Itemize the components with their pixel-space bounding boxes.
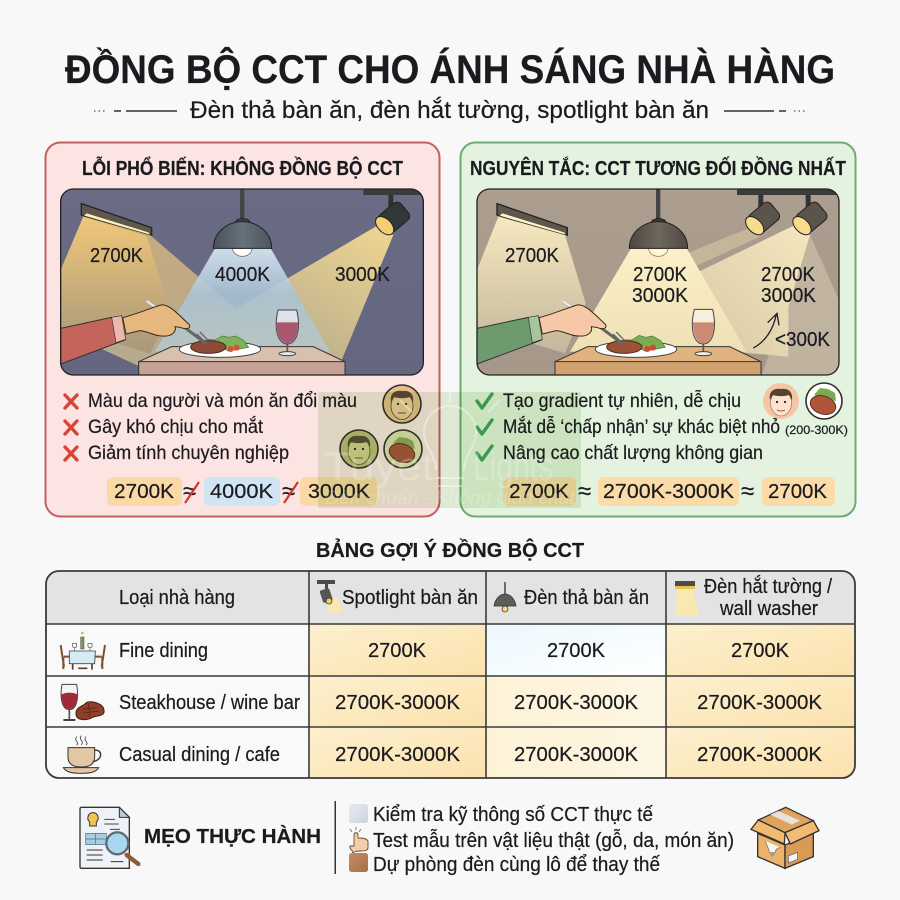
icon: tip inspect [349,804,368,823]
sleeve and hand [477,317,542,364]
subtitle: Đèn thả bàn ăn, đèn hắt tường, spotlight bàn ăn [190,97,709,124]
scene: mismatched lights: 4000K [215,264,271,286]
bullet list: problems: Gây khó chịu cho mắt [88,415,264,438]
wine glass [286,344,288,352]
panel: common mistake [46,142,440,516]
divider [334,801,336,874]
tip 3: Dự phòng đèn cùng lô để thay thế [373,854,660,876]
wall washer [497,204,567,235]
plate and food [179,341,261,357]
table header labels: wall washer [719,598,818,620]
table: CCT recommendations [46,571,855,779]
watermark: Đèn chuẩn - Không gian chất [325,488,576,509]
scene: consistent lights: 2700K [505,245,560,267]
table header labels: Loại nhà hàng [119,587,235,609]
arrow [753,313,779,348]
row: casual dining: 2700K-3000K [514,744,639,766]
table [554,346,762,362]
bullet list: problems [65,390,357,464]
CCT comparison: matched: 2700K [768,481,828,503]
icon: coffee cup [63,736,101,773]
scene: consistent lights [477,189,840,375]
icon: face with green cast [340,430,378,468]
table heading: BẢNG GỢI Ý ĐỒNG BỘ CCT [316,538,584,562]
CCT comparison: mismatched: 3000K [308,481,371,503]
table header labels [119,575,832,620]
icon: natural steak [806,383,842,419]
scene: consistent lights: <300K [775,329,831,351]
CCT comparison: matched [503,477,835,506]
CCT comparison: mismatched: ≈ [183,478,196,505]
CCT comparison: mismatched [107,477,377,506]
row: casual dining: 2700K-3000K [697,744,823,766]
row: fine dining: 2700K [547,640,606,662]
scene: consistent lights: 3000K [632,285,689,307]
table header labels: Đèn hắt tường / [704,575,832,598]
icon: wine and steak [61,684,104,720]
track spotlights [737,190,836,195]
scene: consistent lights: 2700K [633,264,688,286]
scene: mismatched lights: 3000K [335,264,391,286]
bullet list: problems: Giảm tính chuyên nghiệp [88,442,289,464]
icon: tip spare stock [349,853,368,872]
bullet list: problems: Màu da người và món ăn đổi màu [88,390,357,412]
tip 2: Test mẫu trên vật liệu thật (gỗ, da, món ăn) [373,829,734,852]
icon: header pendant [494,582,516,612]
tips list [349,804,734,876]
scene: mismatched lights: 2700K [90,245,144,267]
sleeve and hand [61,317,125,364]
bullet list: benefits: Nâng cao chất lượng không gian [503,442,763,464]
CCT comparison: matched: 2700K [509,481,570,503]
CCT comparison: matched: ≈ [741,478,754,505]
icon: cardboard box [751,807,819,868]
row: steakhouse [61,684,823,720]
row: fine dining [61,632,790,670]
row: fine dining: Fine dining [119,640,208,662]
table header labels: Spotlight bàn ăn [342,587,478,609]
icon: dining table [61,632,105,670]
icon: discoloured steak [384,430,422,468]
watermark: Tuyet [324,445,434,489]
icon: tip pointing hand [350,827,368,854]
tip 1: Kiểm tra kỹ thông số CCT thực tế [373,804,653,826]
table [139,347,345,375]
icon: document with magnifier [80,807,138,868]
icon: natural face [763,383,799,419]
wall washer [81,204,152,235]
row: casual dining [63,736,823,773]
watermark: Lights [473,445,553,489]
icon: header wall washer [675,581,699,615]
row: casual dining: 2700K-3000K [335,744,461,766]
CCT comparison: matched: ≈ [578,478,591,505]
CCT comparison: mismatched: 2700K [114,481,175,503]
CCT comparison: mismatched: ≈ [282,478,295,505]
bullet list: benefits: Mắt dễ ‘chấp nhận’ sự khác biệt nhỏ [503,415,780,438]
panel heading: principle: NGUYÊN TẮC: CCT TƯƠNG ĐỐI ĐỒNG NHẤT [470,156,846,180]
bullet list: benefits [477,389,848,464]
scene: consistent lights: 3000K [761,285,817,307]
tips heading: MẸO THỰC HÀNH [144,825,321,848]
watermark [318,392,581,509]
CCT comparison: matched: 2700K-3000K [603,481,735,503]
CCT comparison: mismatched: 4000K [210,481,274,503]
row: steakhouse: 2700K-3000K [697,692,823,714]
icon: face with orange cast [383,385,421,423]
panel: principle [460,142,856,516]
pendant lamp [656,189,660,219]
panel heading: mistake: LỖI PHỔ BIẾN: KHÔNG ĐỒNG BỘ CCT [82,156,403,180]
wine glass [702,344,704,352]
row: fine dining: 2700K [731,640,790,662]
row: steakhouse: 2700K-3000K [514,692,639,714]
spotlight [363,190,420,195]
bullet list: benefits: Tạo gradient tự nhiên, dễ chịu [503,389,741,412]
row: casual dining: Casual dining / cafe [119,744,280,766]
row: fine dining: 2700K [368,640,427,662]
plate and food [595,341,677,357]
pendant lamp [240,189,244,219]
icon: header spotlight [317,580,343,614]
row: steakhouse: Steakhouse / wine bar [119,692,300,714]
table header labels: Đèn thả bàn ăn [524,587,649,609]
scene: mismatched lights [61,189,423,375]
bullet list: benefits: (200-300K) [785,423,848,437]
title: ĐỒNG BỘ CCT CHO ÁNH SÁNG NHÀ HÀNG [65,46,835,92]
row: steakhouse: 2700K-3000K [335,692,461,714]
scene: consistent lights: 2700K [761,264,816,286]
